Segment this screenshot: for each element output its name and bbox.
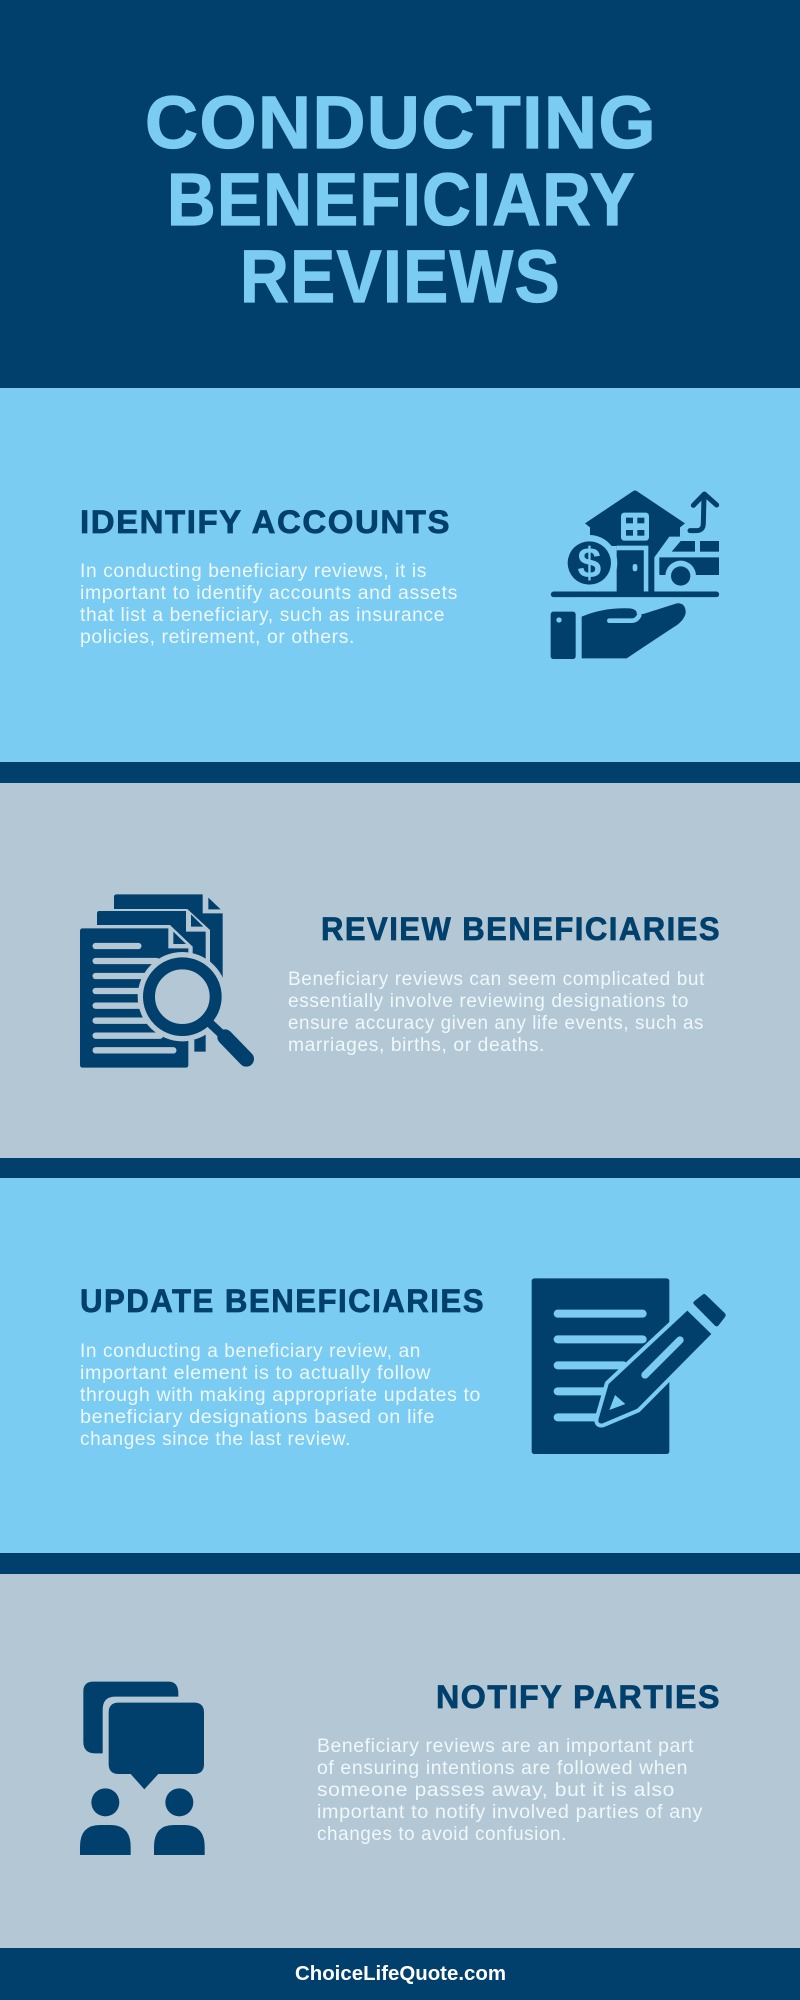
icon: hand holding house, coin and car: $: [577, 539, 601, 587]
icon: documents and magnifying glass: [77, 894, 246, 1068]
text block: identify accounts: that list a beneficiary, such as insurance: [80, 605, 445, 626]
text block: review beneficiaries: Beneficiary reviews can seem complicated but: [288, 969, 705, 990]
text block: review beneficiaries: marriages, births, or deaths.: [288, 1035, 545, 1056]
text block: notify parties: [317, 1736, 703, 1845]
text block: update beneficiaries: changes since the last review.: [80, 1429, 351, 1450]
footer: website: ChoiceLifeQuote.com: [295, 1963, 506, 1985]
heading: identify accounts: IDENTIFY ACCOUNTS: [80, 504, 451, 540]
text block: notify parties: of ensuring intentions are followed when: [317, 1758, 688, 1779]
icon: document and pencil: [532, 1278, 726, 1454]
text block: notify parties: important to notify involved parties of any: [317, 1802, 703, 1823]
title: REVIEWS: [240, 235, 561, 318]
text block: notify parties: someone passes away, but it is also: [317, 1780, 675, 1801]
title: CONDUCTING: [145, 81, 657, 164]
panel: notify parties: [0, 1574, 800, 1948]
title: [145, 81, 657, 318]
text block: update beneficiaries: [80, 1341, 481, 1450]
text block: update beneficiaries: beneficiary designations based on life: [80, 1407, 435, 1428]
text block: identify accounts: policies, retirement, or others.: [80, 627, 355, 648]
text block: review beneficiaries: ensure accuracy given any life events, such as: [288, 1013, 704, 1034]
heading: review beneficiaries: REVIEW BENEFICIARIES: [321, 911, 721, 947]
panel: review beneficiaries: [0, 783, 800, 1158]
heading: notify parties: NOTIFY PARTIES: [436, 1679, 721, 1715]
title: BENEFICIARY: [167, 158, 636, 241]
text block: identify accounts: In conducting beneficiary reviews, it is: [80, 561, 427, 582]
text block: notify parties: changes to avoid confusion.: [317, 1824, 567, 1845]
text block: update beneficiaries: through with making appropriate updates to: [80, 1385, 481, 1406]
panel: identify accounts: [0, 388, 800, 762]
text block: update beneficiaries: important element is to actually follow: [80, 1363, 431, 1384]
icon: speech bubbles and two people: [80, 1682, 205, 1855]
text block: identify accounts: [80, 561, 458, 648]
text block: review beneficiaries: [288, 969, 705, 1056]
text block: review beneficiaries: essentially involve reviewing designations to: [288, 991, 689, 1012]
icon: hand holding house, coin and car: [551, 490, 720, 659]
text block: notify parties: Beneficiary reviews are an important part: [317, 1736, 694, 1757]
text block: identify accounts: important to identify accounts and assets: [80, 583, 458, 604]
panel: update beneficiaries: [0, 1178, 800, 1553]
heading: update beneficiaries: UPDATE BENEFICIARIES: [80, 1283, 485, 1319]
text block: update beneficiaries: In conducting a beneficiary review, an: [80, 1341, 421, 1362]
